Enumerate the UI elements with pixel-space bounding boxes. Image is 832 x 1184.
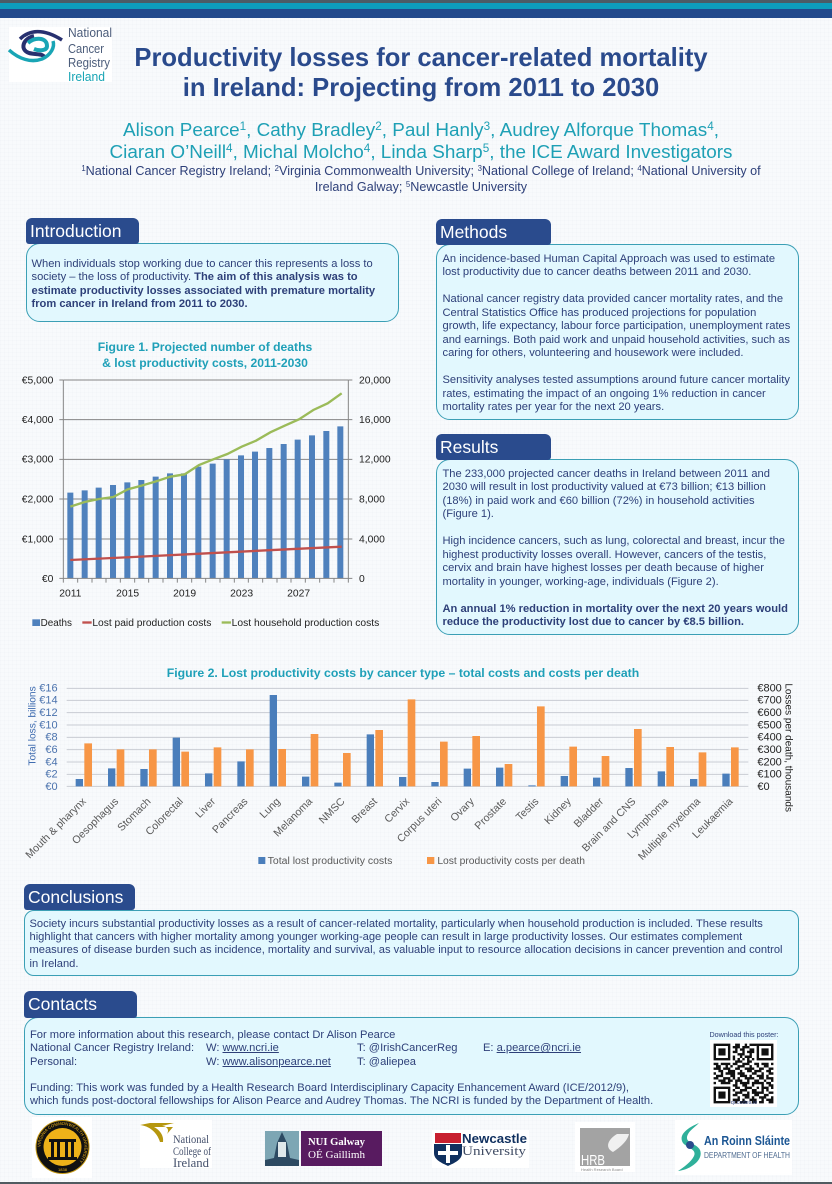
- text block: introduction: estimate productivity losses associated with premature mortality: [32, 285, 375, 297]
- contact box: W: www.alisonpearce.net: [206, 1056, 331, 1068]
- heading: results: [436, 434, 551, 460]
- logo: Virginia Commonwealth University: VIRGINIA COMMONWEALTH UNIVERSITY: [38, 1122, 88, 1164]
- text block: results: The 233,000 projected cancer deaths in Ireland between 2011 and: [442, 468, 770, 480]
- left axis labels: €10: [39, 719, 58, 731]
- category labels: Breast: [350, 796, 380, 826]
- left axis labels: €1,000: [22, 534, 54, 545]
- heading: methods: [436, 219, 551, 245]
- heading: contacts: [24, 991, 137, 1018]
- line: lost paid production costs: [70, 547, 342, 560]
- left axis labels: €3,000: [22, 455, 54, 466]
- right axis labels: €800: [757, 682, 782, 694]
- right axis labels: €400: [757, 732, 782, 744]
- category labels: Multiple myeloma: [636, 796, 703, 863]
- left axis labels: €14: [39, 695, 58, 707]
- contact details: W: www.ncri.ie: [206, 1042, 279, 1054]
- text block: results: 2030 will result in lost productivity valued at €73 billion; €13 billion: [442, 481, 766, 493]
- text block: introduction: society – the loss of productivity. The aim of this analysis was to: [32, 271, 358, 283]
- logo: Virginia Commonwealth University: 1838: [58, 1167, 68, 1172]
- left axis labels: €12: [39, 707, 58, 719]
- logo: National College of Ireland: Ireland: [173, 1155, 209, 1170]
- right axis labels: €0: [757, 781, 770, 793]
- text block: methods: [436, 244, 799, 420]
- affiliations: 1National Cancer Registry Ireland; 2Virginia Commonwealth University; 3National College of Ireland; 4National University of: [81, 164, 761, 178]
- text block: methods: rates, estimating the impact of an ongoing 1% reduction in cancer: [442, 388, 766, 400]
- text block: conclusions: highlight that cancers with higher mortality among younger working-age people can result in large productivity losses. Our estimates complement: [30, 931, 742, 943]
- title: in Ireland: Projecting from 2011 to 2030: [183, 74, 659, 102]
- category labels: Oesophagus: [70, 796, 121, 847]
- logo: NUI Galway: NUI Galway: [308, 1136, 365, 1148]
- logo: NUI Galway: [265, 1131, 382, 1166]
- category labels: Lung: [258, 796, 283, 821]
- legend: [258, 856, 585, 867]
- left axis labels: €6: [45, 744, 58, 756]
- category labels: Melanoma: [271, 796, 315, 839]
- right axis labels: €500: [757, 719, 782, 731]
- right axis labels: €300: [757, 744, 782, 756]
- left axis labels: €0: [45, 781, 58, 793]
- logo: National Cancer Registry Ireland: Registry: [68, 55, 110, 70]
- right axis title: Losses per death, thousands: [783, 683, 794, 812]
- panel: results: [436, 434, 799, 635]
- category labels: Bladder: [572, 795, 606, 830]
- left axis labels: [39, 682, 58, 793]
- logo: An Roinn Sláinte Department of Health: An Roinn Sláinte: [704, 1133, 790, 1148]
- logo: NUI Galway: OÉ Gaillimh: [308, 1149, 365, 1161]
- bars: total lost productivity costs: [76, 695, 730, 786]
- legend: Deaths: [41, 618, 72, 629]
- text block: methods: lost productivity due to cancer deaths between 2011 and 2030.: [442, 266, 751, 278]
- QR code URL: qr.codes.ie: [731, 1100, 757, 1106]
- footer band: [0, 1182, 832, 1184]
- heading: introduction: [26, 218, 139, 244]
- year labels: 2023: [230, 589, 253, 600]
- right axis labels: [757, 682, 782, 793]
- bars: deaths: [67, 426, 343, 578]
- left axis labels: €16: [39, 682, 58, 694]
- text block: results: highest productivity losses overall. However, cancers of the testis,: [442, 549, 766, 561]
- text block: conclusions: in Ireland.: [30, 958, 78, 970]
- figure 1 title: Figure 1. Projected number of deaths: [98, 340, 312, 354]
- year labels: 2011: [59, 589, 82, 600]
- right axis labels: €200: [757, 756, 782, 768]
- logo: National Cancer Registry Ireland: National: [68, 25, 112, 40]
- contact details: [30, 1028, 581, 1068]
- affiliations: [81, 164, 761, 194]
- funding statement: [30, 1082, 653, 1107]
- text block: methods: Sensitivity analyses tested assumptions around future cancer mortality: [442, 374, 790, 386]
- category labels: Leukaemia: [690, 796, 736, 841]
- icon: QR code: [710, 1040, 777, 1107]
- text block: results: [436, 459, 799, 635]
- left axis labels: €2: [45, 769, 58, 781]
- text block: methods: caring for others, volunteering and housework were included.: [442, 347, 743, 359]
- authors: [110, 120, 732, 163]
- text block: methods: growth, life expectancy, labour force participation, unemployment rates: [442, 320, 790, 332]
- line: lost household production costs: [70, 393, 342, 507]
- logo: Health Research Board: HRB: [581, 1152, 605, 1169]
- right axis labels: 8,000: [359, 495, 385, 506]
- logo: An Roinn Sláinte Department of Health: DEPARTMENT OF HEALTH: [704, 1150, 790, 1160]
- panel: introduction: [26, 218, 399, 322]
- text block: methods: An incidence-based Human Capital Approach was used to estimate: [442, 253, 775, 265]
- category labels: Stomach: [115, 796, 153, 834]
- logo: National College of Ireland: [140, 1120, 212, 1170]
- text block: results: High incidence cancers, such as lung, colorectal and breast, incur the: [442, 535, 785, 547]
- funding statement: which funds post-doctoral fellowships for Alison Pearce and Audrey Thomas. The NCRI is funded by the Department of Health.: [30, 1095, 653, 1107]
- legend: Total lost productivity costs: [268, 856, 392, 867]
- logo: National Cancer Registry Ireland: [8, 25, 112, 84]
- logo: National College of Ireland: College of: [173, 1144, 211, 1158]
- text block: conclusions: Society incurs substantial productivity losses as a result of cancer-related mortality, particularly when household production is included. These results: [30, 918, 763, 930]
- right axis labels: [359, 375, 391, 585]
- title: Productivity losses for cancer-related mortality: [134, 44, 708, 72]
- logo: Newcastle University: [432, 1130, 529, 1168]
- logo: Health Research Board: Health Research Board: [581, 1167, 623, 1172]
- panel: methods: [436, 219, 799, 420]
- category labels: [23, 795, 736, 863]
- right axis labels: 16,000: [359, 415, 391, 426]
- logo: Health Research Board: [575, 1122, 635, 1172]
- authors: Ciaran O’Neill4, Michal Molcho4, Linda Sharp5, the ICE Award Investigators: [110, 142, 732, 163]
- left axis labels: €4,000: [22, 415, 54, 426]
- logo: National College of Ireland: National: [173, 1132, 210, 1146]
- bars: lost productivity costs per death: [84, 699, 739, 786]
- left axis labels: €8: [45, 732, 58, 744]
- right axis labels: €100: [757, 769, 782, 781]
- logo: National Cancer Registry Ireland: Cancer: [68, 41, 105, 56]
- text block: results: mortality in younger, working-age, individuals (Figure 2).: [442, 576, 719, 588]
- category labels: Corpus uteri: [395, 796, 444, 845]
- panel: contacts: [24, 991, 799, 1115]
- year labels: 2019: [173, 589, 196, 600]
- text block: results: An annual 1% reduction in mortality over the next 20 years would: [442, 603, 788, 615]
- year labels: [59, 589, 310, 600]
- right axis labels: €600: [757, 707, 782, 719]
- text block: results: reduce the productivity lost due to cancer by €8.5 billion.: [442, 616, 744, 628]
- year labels: 2015: [116, 589, 139, 600]
- contact details: National Cancer Registry Ireland:: [30, 1042, 194, 1054]
- QR code caption: Download this poster:: [709, 1030, 779, 1039]
- contact details: T: @IrishCancerReg: [357, 1042, 457, 1054]
- category labels: Cervix: [382, 795, 413, 825]
- figure 2 title: Figure 2. Lost productivity costs by cancer type – total costs and costs per death: [167, 666, 639, 680]
- legend: Lost household production costs: [232, 618, 379, 629]
- figure 1 title: & lost productivity costs, 2011-2030: [102, 356, 308, 370]
- heading: introduction: Introduction: [30, 221, 121, 241]
- heading: contacts: Contacts: [28, 994, 97, 1014]
- logo: Newcastle University: Newcastle: [462, 1132, 527, 1146]
- legend: Lost paid production costs: [92, 618, 211, 629]
- heading: results: Results: [440, 437, 498, 457]
- left axis title: Total loss, billions: [28, 686, 39, 766]
- text block: results: (18%) in paid work and €60 billion (72%) in household activities: [442, 495, 755, 507]
- legend: [32, 618, 379, 629]
- heading: conclusions: Conclusions: [28, 887, 123, 907]
- contact box: T: @aliepea: [357, 1056, 416, 1068]
- category labels: Kidney: [542, 795, 574, 827]
- category labels: Brain and CNS: [580, 796, 638, 854]
- contact box: Personal:: [30, 1056, 77, 1068]
- legend: Lost productivity costs per death: [437, 856, 585, 867]
- header band: [0, 0, 832, 18]
- contact details: For more information about this research, please contact Dr Alison Pearce: [30, 1028, 395, 1040]
- logo: National Cancer Registry Ireland: Ireland: [68, 69, 105, 84]
- text block: methods: and earnings. Both paid work and unpaid household activities, such as: [442, 334, 790, 346]
- right axis labels: €700: [757, 695, 782, 707]
- category labels: Lymphoma: [625, 796, 671, 841]
- text block: introduction: When individuals stop working due to cancer this represents a loss to: [32, 258, 373, 270]
- category labels: Ovary: [448, 795, 477, 824]
- heading: conclusions: [24, 884, 135, 910]
- left axis labels: €5,000: [22, 375, 54, 386]
- right axis labels: 12,000: [359, 455, 391, 466]
- logo: Virginia Commonwealth University: [32, 1117, 92, 1178]
- category labels: Prostate: [473, 796, 509, 832]
- right axis labels: 20,000: [359, 375, 391, 386]
- chart: figure 1 deaths and costs: [22, 375, 391, 629]
- category labels: Colorectal: [143, 796, 186, 838]
- authors: Alison Pearce1, Cathy Bradley2, Paul Hanly3, Audrey Alforque Thomas4,: [123, 120, 719, 141]
- text block: methods: mortality rates per year for the next 20 years.: [442, 401, 664, 413]
- text block: introduction: [26, 243, 399, 322]
- left axis labels: [22, 375, 54, 585]
- figure 1 title: [98, 340, 312, 370]
- year labels: 2027: [287, 589, 310, 600]
- left axis labels: €2,000: [22, 495, 54, 506]
- text block: methods: Central Statistics Office has produced projections for population: [442, 307, 756, 319]
- right axis labels: 4,000: [359, 534, 385, 545]
- category labels: NMSC: [317, 795, 348, 826]
- category labels: Testis: [514, 796, 541, 823]
- funding statement: Funding: This work was funded by a Health Research Board Interdisciplinary Capacity Enhancement Award (ICE/2012/9),: [30, 1082, 629, 1094]
- text block: results: cervix and brain have highest losses per death because of higher: [442, 562, 764, 574]
- chart: figure 2 costs by cancer type: [23, 682, 794, 867]
- category labels: Pancreas: [210, 796, 250, 836]
- text block: conclusions: measures of disease burden such as incidence, mortality and survival, as valuable input to resource allocation decisions in cancer prevention and control: [30, 944, 783, 956]
- right axis labels: 0: [359, 574, 365, 585]
- text block: methods: National cancer registry data provided cancer mortality rates, and the: [442, 293, 783, 305]
- logo: Newcastle University: University: [462, 1143, 527, 1158]
- text block: conclusions: [24, 910, 799, 976]
- logo: An Roinn Sláinte Department of Health: [675, 1120, 792, 1175]
- panel: conclusions: [24, 884, 799, 976]
- left axis labels: €4: [45, 756, 58, 768]
- left axis labels: €0: [42, 574, 54, 585]
- text block: introduction: from cancer in Ireland from 2011 to 2030.: [32, 298, 248, 310]
- category labels: Liver: [193, 795, 218, 820]
- category labels: Mouth & pharynx: [23, 795, 89, 861]
- contact details: E: a.pearce@ncri.ie: [483, 1042, 581, 1054]
- contact box: [24, 1017, 799, 1115]
- heading: methods: Methods: [440, 222, 507, 242]
- text block: results: (Figure 1).: [442, 508, 494, 520]
- title: [134, 44, 708, 102]
- affiliations: Ireland Galway; 5Newcastle University: [315, 180, 527, 194]
